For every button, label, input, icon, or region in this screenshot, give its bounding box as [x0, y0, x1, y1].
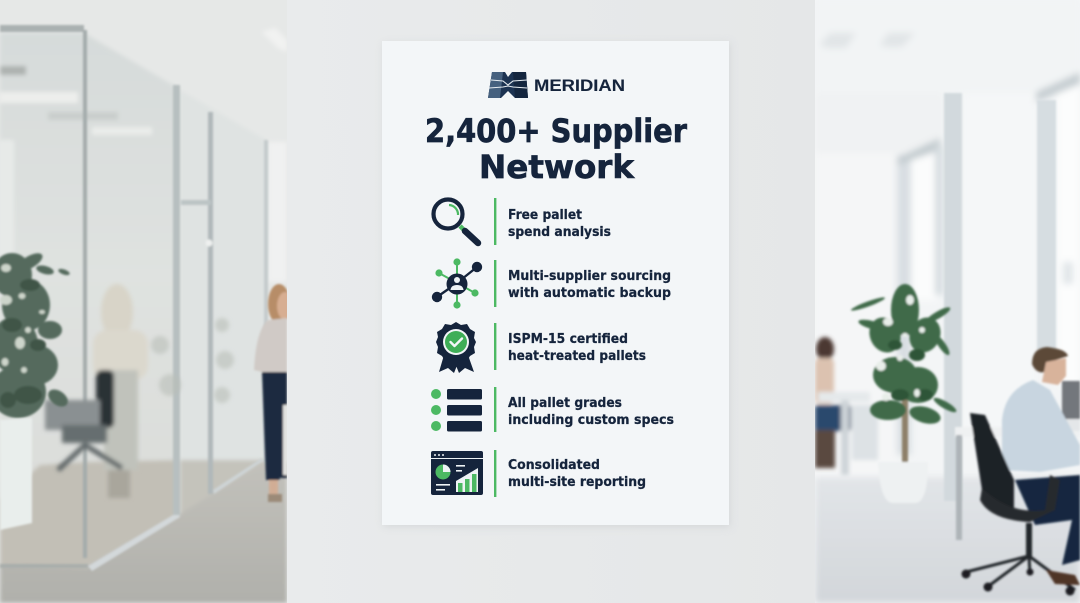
- text: free pallet spend analysis: [508, 207, 611, 240]
- poster shadow: [383, 43, 730, 527]
- text: consolidated reporting: Consolidated: [508, 457, 600, 473]
- plant: [0, 250, 71, 418]
- icon: logo mark: [488, 72, 528, 98]
- text: consolidated reporting: [508, 457, 646, 490]
- text: multi-supplier sourcing: [508, 268, 671, 301]
- left office scene: [0, 0, 293, 603]
- woman walking: [254, 282, 287, 503]
- text: ISPM-15 certified: [508, 331, 646, 364]
- text: free pallet spend analysis: Free pallet: [508, 207, 582, 223]
- item 2: multi-supplier sourcing: [432, 258, 671, 309]
- icon: certified badge: [436, 322, 476, 373]
- divider: [494, 387, 496, 432]
- text: ISPM-15 certified: ISPM-15 certified: [508, 331, 628, 347]
- title: Network: [479, 148, 635, 186]
- item 4: pallet grades: [431, 387, 674, 432]
- text: consolidated reporting: multi-site reporting: [508, 474, 646, 490]
- text: ISPM-15 certified: heat-treated pallets: [508, 348, 646, 364]
- centre wall: [287, 0, 815, 603]
- seated woman: [815, 337, 878, 475]
- text: all pallet grades: All pallet grades: [508, 395, 622, 411]
- planter: [0, 418, 32, 530]
- icon: grades list: [431, 389, 482, 432]
- divider: [494, 198, 496, 245]
- man at desk: [955, 347, 1080, 596]
- text: all pallet grades: including custom specs: [508, 412, 674, 428]
- item 5: reporting: [431, 450, 646, 497]
- divider: [494, 450, 496, 497]
- right office scene: [815, 0, 1080, 603]
- text: free pallet spend analysis: spend analysis: [508, 224, 611, 240]
- potted plant: [850, 284, 958, 503]
- wordmark: MERIDIAN: [534, 77, 625, 95]
- icon: magnifying glass: [434, 200, 478, 243]
- poster: [382, 41, 729, 525]
- item 3: ISPM-15 certified: [436, 322, 646, 373]
- icon: reporting dashboard: [431, 451, 483, 495]
- text: multi-supplier sourcing: with automatic backup: [508, 285, 671, 301]
- icon: supplier network: [432, 258, 482, 309]
- reflection and chair: [45, 284, 234, 498]
- divider: [494, 260, 496, 307]
- title: [425, 112, 687, 186]
- divider: [494, 323, 496, 370]
- logo: Meridian: [488, 72, 625, 98]
- title: 2,400+ Supplier: [425, 112, 687, 150]
- text: multi-supplier sourcing: Multi-supplier sourcing: [508, 268, 671, 284]
- text: all pallet grades: [508, 395, 674, 428]
- item 1: spend analysis: [434, 198, 611, 245]
